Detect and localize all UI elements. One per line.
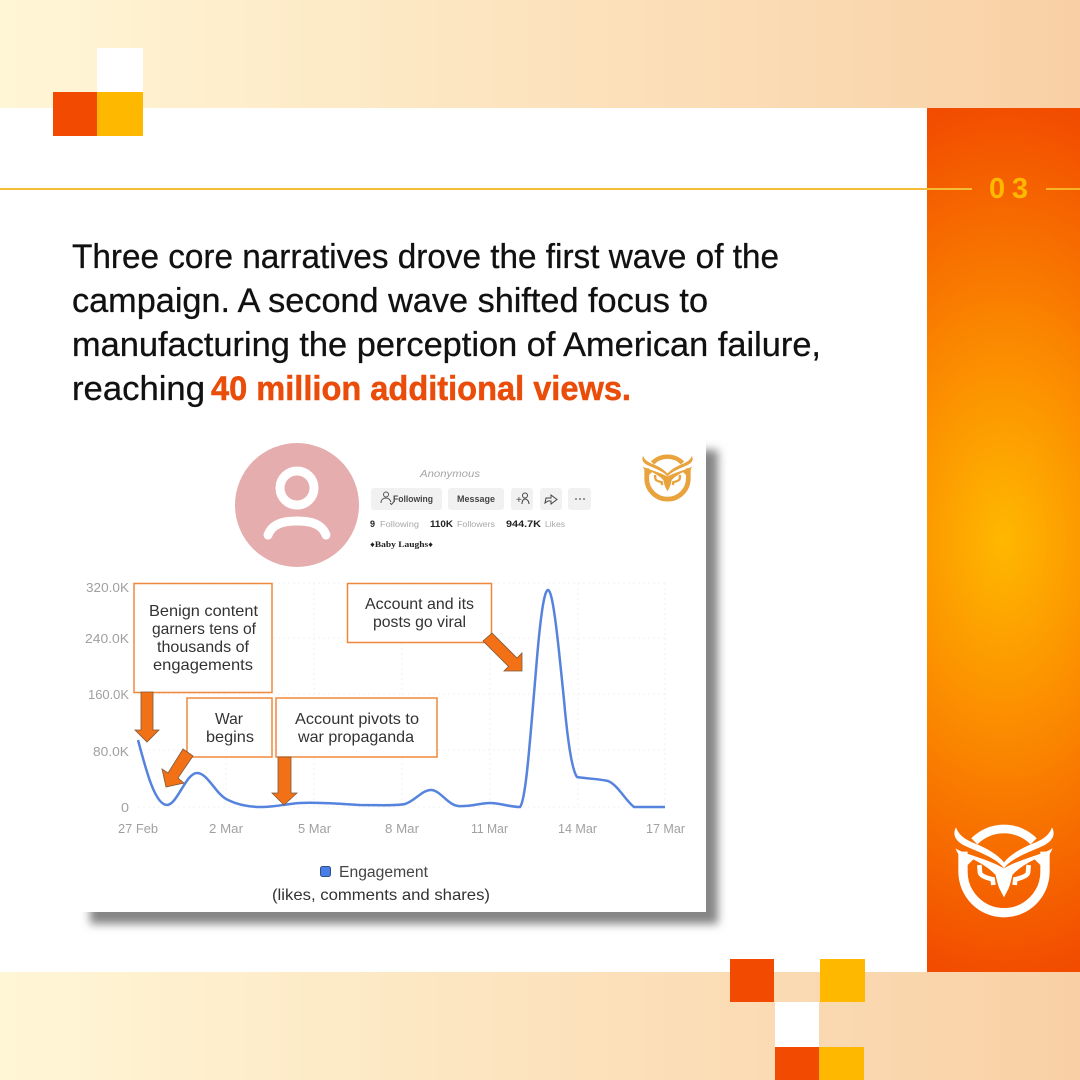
callout: benign content: garners tens of xyxy=(152,621,257,638)
profile details: Message xyxy=(457,494,495,504)
profile details: Following xyxy=(380,519,419,529)
orange side panel xyxy=(927,108,1080,972)
profile details: ♦Baby Laughs♦ xyxy=(370,540,433,549)
y axis labels: 160.0K xyxy=(88,687,129,702)
icon: white owl logo xyxy=(954,827,1054,913)
arrow: to viral peak xyxy=(483,633,522,671)
arrow: to war start xyxy=(162,749,193,787)
engagement line xyxy=(138,590,665,807)
callout: goes viral xyxy=(348,584,492,642)
heading paragraph: Three core narratives drove the first wave of the xyxy=(72,238,779,276)
y axis labels xyxy=(85,580,129,815)
profile details: Anonymous xyxy=(419,469,480,480)
arrow: to first peak xyxy=(135,692,159,742)
callout: benign content: thousands of xyxy=(157,639,250,656)
chart: engagement line chart xyxy=(85,580,686,836)
profile details: 944.7K xyxy=(506,519,542,529)
page number: 03 xyxy=(989,173,1028,205)
legend: (likes, comments and shares) xyxy=(272,887,490,904)
callout: war begins: begins xyxy=(206,729,254,746)
callout: benign content: engagements xyxy=(153,657,253,674)
y axis labels: 320.0K xyxy=(86,580,129,595)
callout: account pivots xyxy=(276,698,437,757)
callout: account pivots: war propaganda xyxy=(297,729,414,746)
callout: goes viral: Account and its xyxy=(365,596,474,613)
y axis labels: 0 xyxy=(121,800,129,815)
x axis labels: 8 Mar xyxy=(385,821,420,836)
profile details: Followers xyxy=(457,519,495,529)
x axis labels xyxy=(118,821,686,836)
x axis labels: 11 Mar xyxy=(471,821,509,836)
x axis labels: 27 Feb xyxy=(118,821,158,836)
profile details: + xyxy=(516,495,522,506)
legend xyxy=(272,864,490,904)
icon: small owl logo xyxy=(642,456,693,499)
heading paragraph xyxy=(72,238,821,408)
legend: Engagement xyxy=(339,864,429,881)
profile details: Likes xyxy=(545,519,565,529)
x axis labels: 5 Mar xyxy=(298,821,332,836)
callout: goes viral: posts go viral xyxy=(373,614,466,631)
bottom decorative squares xyxy=(730,959,865,1080)
callout: war begins: War xyxy=(215,711,244,728)
callout: war begins xyxy=(187,698,272,757)
callout: benign content xyxy=(134,584,272,692)
heading paragraph: 40 million additional views. xyxy=(211,370,631,408)
profile details: 9 xyxy=(370,519,375,529)
x axis labels: 14 Mar xyxy=(558,821,598,836)
top gradient band xyxy=(0,0,1080,108)
callout: benign content: Benign content xyxy=(149,603,259,620)
y axis labels: 240.0K xyxy=(85,631,129,646)
bottom gradient band xyxy=(0,972,1080,1080)
icon: avatar xyxy=(235,443,359,567)
x axis labels: 2 Mar xyxy=(209,821,244,836)
arrow: to pivot xyxy=(272,757,297,805)
heading paragraph: reaching xyxy=(72,370,205,408)
y axis labels: 80.0K xyxy=(93,744,129,759)
callout: account pivots: Account pivots to xyxy=(295,711,419,728)
x axis labels: 17 Mar xyxy=(646,821,686,836)
profile details: Following xyxy=(393,494,433,504)
heading paragraph: campaign. A second wave shifted focus to xyxy=(72,282,708,320)
panel: engagement screenshot card xyxy=(76,440,718,924)
profile details xyxy=(370,469,591,549)
top decorative squares xyxy=(53,48,143,136)
heading paragraph: manufacturing the perception of American failure, xyxy=(72,326,821,364)
profile details: 110K xyxy=(430,519,454,529)
